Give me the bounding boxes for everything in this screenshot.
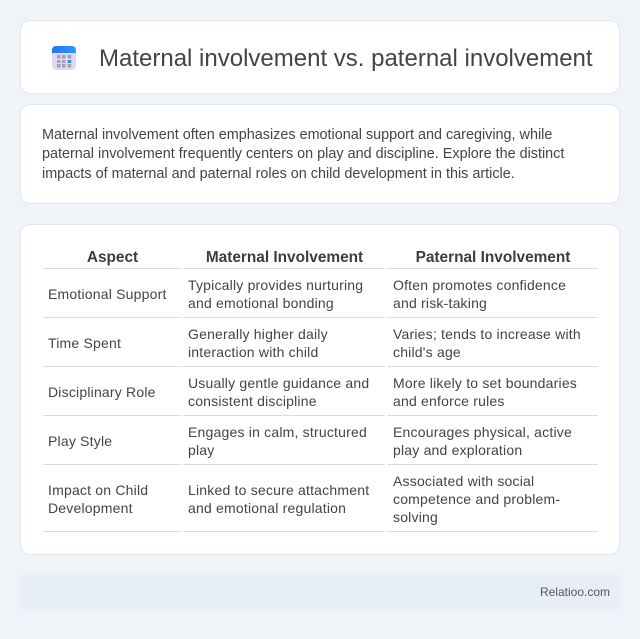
intro text: impacts of maternal and paternal roles on child development in this article. xyxy=(42,166,515,182)
row: play style: play and exploration xyxy=(393,442,522,458)
row: disciplinary role: consistent discipline xyxy=(188,393,317,409)
row: time spent: Varies; tends to increase with xyxy=(393,326,581,342)
intro text xyxy=(42,126,564,182)
intro card xyxy=(20,104,620,204)
row: impact on child development: and emotional regulation xyxy=(188,500,346,516)
row: impact on child development: Development xyxy=(48,500,133,516)
table headers xyxy=(87,249,570,266)
row: play style: Encourages physical, active xyxy=(393,424,572,440)
row: impact on child development: Linked to secure attachment xyxy=(188,482,369,498)
row: impact on child development: solving xyxy=(393,509,438,525)
row: emotional support: and emotional bonding xyxy=(188,295,334,311)
row: impact on child development: Impact on Child xyxy=(48,482,148,498)
row: disciplinary role: Disciplinary Role xyxy=(48,384,156,400)
table headers: Maternal Involvement xyxy=(206,249,363,266)
intro text: paternal involvement frequently centers on play and discipline. Explore the distinct xyxy=(42,146,564,162)
row: disciplinary role: and enforce rules xyxy=(393,393,505,409)
row: impact on child development xyxy=(48,473,560,525)
row: impact on child development: competence and problem- xyxy=(393,491,560,507)
row: time spent: interaction with child xyxy=(188,344,318,360)
title: Maternal involvement vs. paternal involvement xyxy=(99,45,593,72)
row: play style: play xyxy=(188,442,214,458)
table headers: Paternal Involvement xyxy=(416,249,570,266)
row: disciplinary role: More likely to set boundaries xyxy=(393,375,577,391)
row: emotional support: Often promotes confidence xyxy=(393,277,566,293)
table card xyxy=(20,224,620,555)
row: impact on child development: Associated with social xyxy=(393,473,534,489)
footer text: Relatioo.com xyxy=(540,585,610,599)
table headers: Aspect xyxy=(87,249,138,266)
icon: calendar xyxy=(52,46,76,70)
footer bar xyxy=(20,575,620,609)
row: play style: Play Style xyxy=(48,433,112,449)
row: disciplinary role: Usually gentle guidance and xyxy=(188,375,369,391)
row: time spent: child's age xyxy=(393,344,461,360)
row: emotional support: and risk-taking xyxy=(393,295,487,311)
row: emotional support xyxy=(48,277,566,311)
row: time spent: Time Spent xyxy=(48,335,121,351)
intro text: Maternal involvement often emphasizes emotional support and caregiving, while xyxy=(42,126,552,142)
header card xyxy=(20,20,620,94)
row: time spent xyxy=(48,326,581,360)
row: play style: Engages in calm, structured xyxy=(188,424,367,440)
row: time spent: Generally higher daily xyxy=(188,326,328,342)
row: play style xyxy=(48,424,572,458)
row: disciplinary role xyxy=(48,375,577,409)
row: emotional support: Emotional Support xyxy=(48,286,167,302)
row: emotional support: Typically provides nurturing xyxy=(188,277,363,293)
